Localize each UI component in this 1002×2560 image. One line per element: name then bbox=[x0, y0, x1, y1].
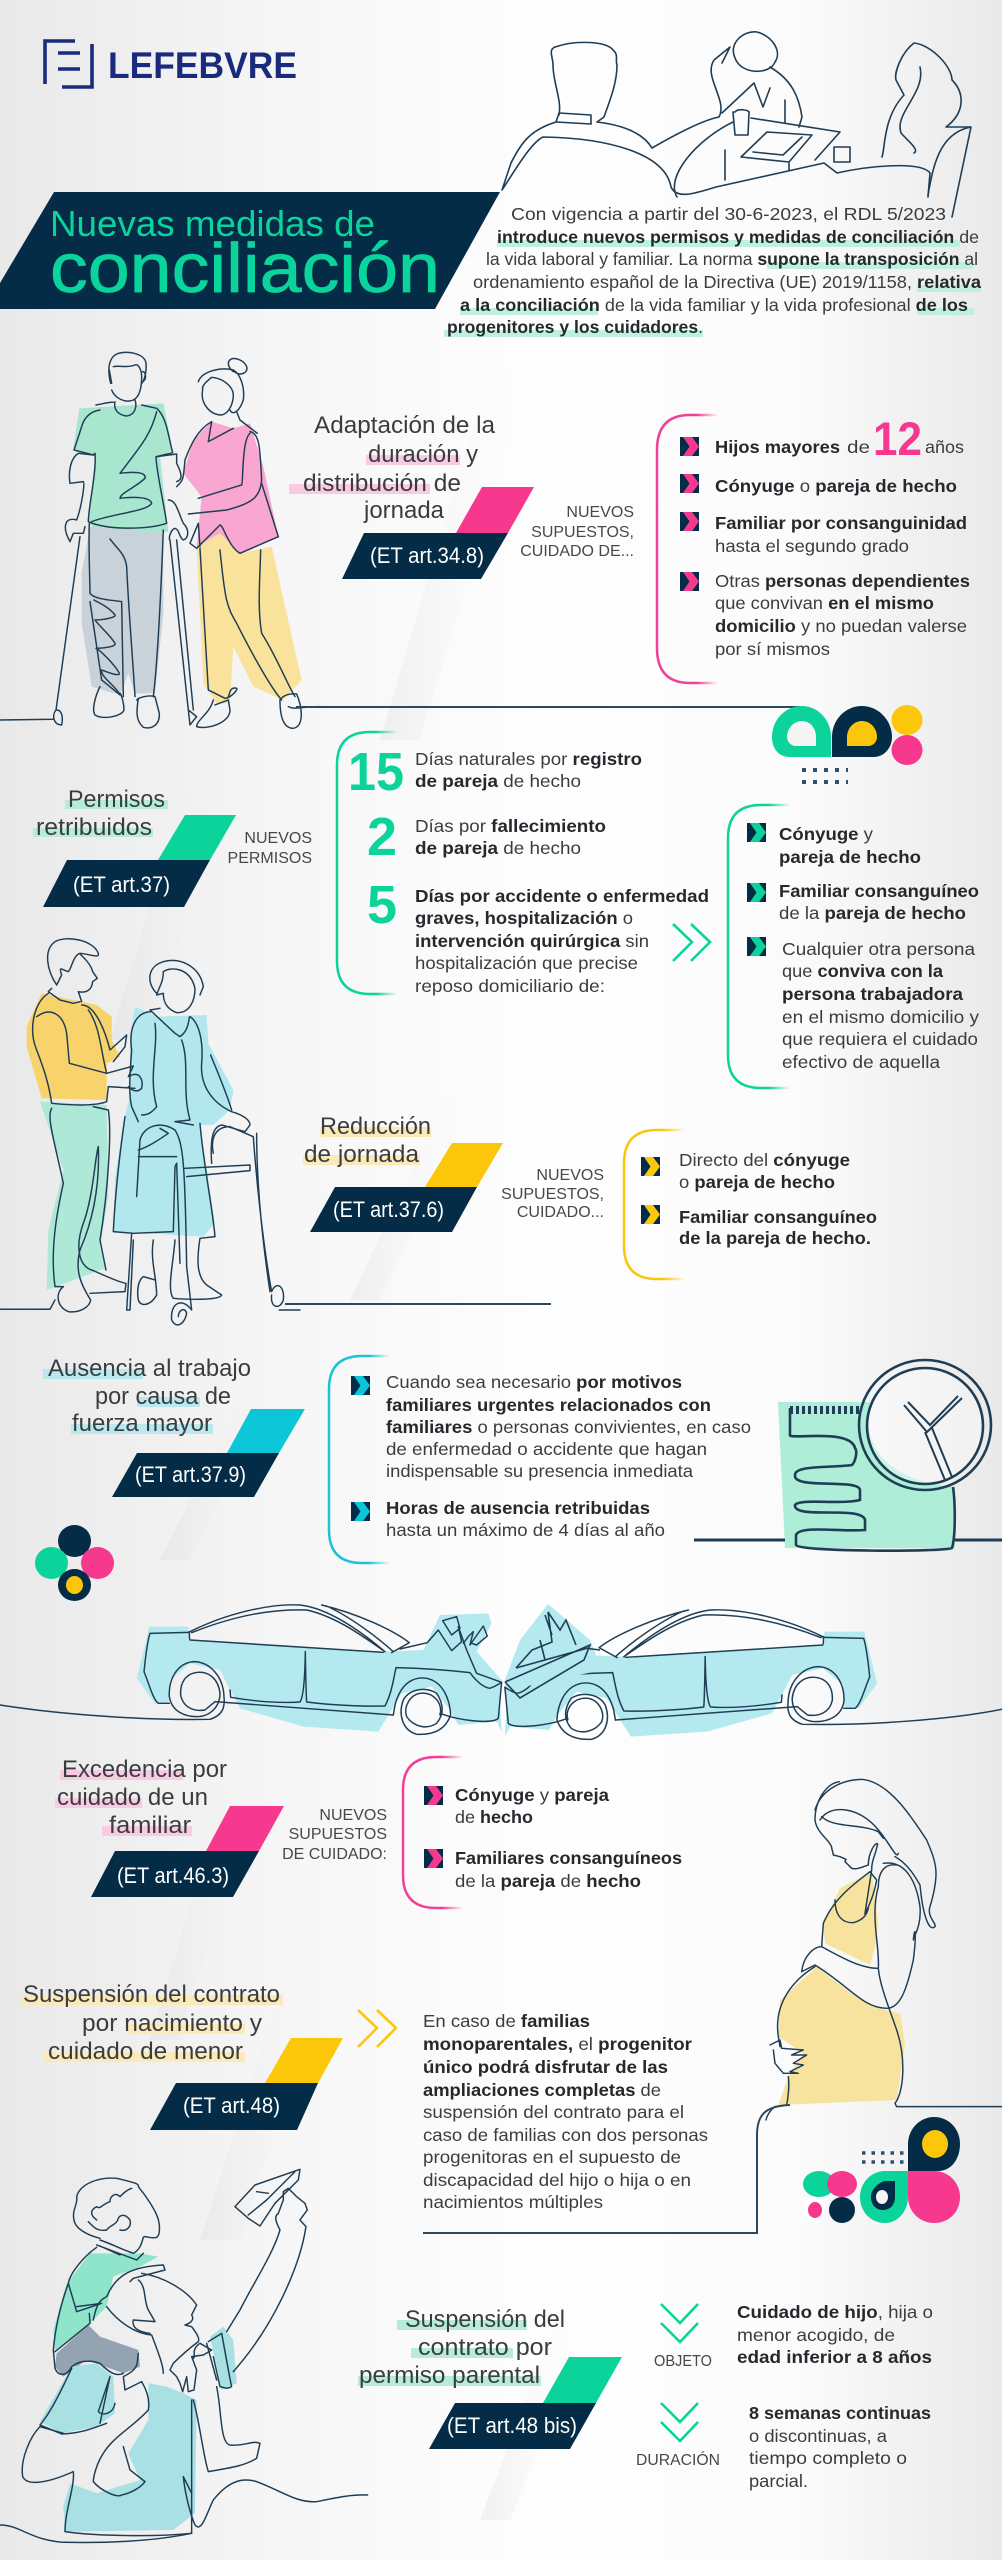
heading: fuerza mayor bbox=[72, 1410, 212, 1437]
bracket list bbox=[329, 1356, 751, 1563]
arrow: double chevron bbox=[358, 2010, 396, 2047]
title banner bbox=[0, 192, 500, 309]
bullet bbox=[680, 512, 699, 531]
panel: days list: de pareja de hecho bbox=[415, 838, 581, 858]
bracket list: familiares urgentes relacionados con bbox=[386, 1395, 711, 1415]
text block: monoparentales, el progenitor bbox=[423, 2034, 692, 2054]
bracket list: Horas de ausencia retribuidas bbox=[386, 1498, 650, 1518]
arrow: double chevron bbox=[673, 924, 710, 961]
illustration: notebook and clock bbox=[694, 1360, 1002, 1551]
heading: por causa de bbox=[95, 1383, 231, 1410]
bullet bbox=[747, 823, 766, 842]
logo: Lefebvre bbox=[45, 41, 297, 87]
bullet bbox=[747, 883, 766, 902]
bracket list: 12 bbox=[873, 412, 922, 465]
badge: (ET art.34.8) bbox=[370, 543, 484, 568]
label: NUEVOS bbox=[536, 1167, 604, 1184]
badge bbox=[429, 2357, 622, 2449]
section: excedencia bbox=[55, 1756, 682, 1908]
text block: duración: o discontinuas, a bbox=[749, 2426, 887, 2446]
illustration: meeting people bbox=[502, 32, 971, 217]
label: NUEVOS bbox=[566, 504, 634, 521]
panel: days list: hospitalización que precise bbox=[415, 953, 638, 973]
panel: days list: 15 bbox=[348, 742, 404, 802]
label: DE CUIDADO: bbox=[282, 1846, 387, 1863]
bullet bbox=[641, 1205, 660, 1224]
bracket list bbox=[657, 412, 970, 683]
badge: (ET art.37) bbox=[73, 872, 170, 897]
bracket list: familiares o personas convivientes, en caso bbox=[386, 1417, 751, 1437]
panel: days list: Días por fallecimiento bbox=[415, 816, 606, 836]
decoration: four circles bbox=[35, 1525, 114, 1601]
bracket list: Familiares consanguíneos bbox=[455, 1848, 682, 1868]
heading: Adaptación de la bbox=[314, 412, 495, 439]
bullet bbox=[747, 937, 766, 956]
section: permisos retribuidos bbox=[33, 732, 979, 1088]
label: SUPUESTOS, bbox=[501, 1186, 604, 1203]
heading: Reducción bbox=[320, 1113, 431, 1140]
illustration: car crash bbox=[0, 1604, 1002, 1739]
bullet bbox=[680, 572, 699, 591]
heading: retribuidos bbox=[36, 814, 152, 841]
label: CUIDADO... bbox=[517, 1204, 604, 1221]
label bbox=[228, 830, 312, 867]
bracket list: años bbox=[925, 437, 964, 457]
text block: duración: parcial. bbox=[749, 2471, 808, 2491]
bracket list: de enfermedad o accidente que hagan bbox=[386, 1439, 707, 1459]
heading bbox=[43, 1355, 251, 1437]
text block: ampliaciones completas de bbox=[423, 2080, 661, 2100]
badge bbox=[310, 1143, 503, 1232]
heading: Suspensión del contrato bbox=[23, 1981, 280, 2008]
text block: único podrá disfrutar de las bbox=[423, 2057, 668, 2077]
bracket list: indispensable su presencia inmediata bbox=[386, 1461, 693, 1481]
bullet bbox=[424, 1849, 443, 1868]
bullet bbox=[641, 1157, 660, 1176]
icon: chevrons duración bbox=[661, 2403, 698, 2441]
text block bbox=[423, 2011, 708, 2212]
bracket list bbox=[403, 1757, 682, 1908]
title line 1: Nuevas medidas de bbox=[50, 203, 375, 244]
bullet bbox=[680, 474, 699, 493]
badge: (ET art.37.6) bbox=[333, 1197, 444, 1222]
text block: objeto: menor acogido, de bbox=[737, 2325, 895, 2345]
bracket list: Cónyuge o pareja de hecho bbox=[715, 476, 957, 496]
bracket list: Hijos mayores bbox=[715, 437, 840, 457]
bracket list: Familiar por consanguinidad bbox=[715, 513, 967, 533]
line bbox=[423, 2105, 790, 2233]
bracket list: de la pareja de hecho. bbox=[679, 1228, 871, 1248]
panel: who: de la pareja de hecho bbox=[779, 903, 966, 923]
crash shards bbox=[505, 1604, 602, 1698]
heading bbox=[22, 1981, 283, 2065]
heading: de jornada bbox=[304, 1141, 419, 1168]
panel: who: en el mismo domicilio y bbox=[782, 1007, 979, 1027]
label: PERMISOS bbox=[228, 850, 312, 867]
badge: (ET art.46.3) bbox=[117, 1863, 229, 1888]
label: CUIDADO DE... bbox=[520, 543, 634, 560]
panel: who: pareja de hecho bbox=[779, 847, 921, 867]
panel: days list: de pareja de hecho bbox=[415, 771, 581, 791]
label: SUPUESTOS, bbox=[531, 524, 634, 541]
bracket list: Cuando sea necesario por motivos bbox=[386, 1372, 682, 1392]
text block: caso de familias con dos personas bbox=[423, 2125, 708, 2145]
heading: duración y bbox=[368, 441, 479, 468]
label bbox=[282, 1807, 387, 1863]
panel: days list: intervención quirúrgica sin bbox=[415, 931, 649, 951]
panel: days list: 5 bbox=[367, 875, 397, 935]
heading bbox=[55, 1756, 227, 1839]
bracket list: o pareja de hecho bbox=[679, 1172, 835, 1192]
label bbox=[501, 1167, 604, 1221]
intro text: ordenamiento español de la Directiva (UE) 2019/1158, relativa bbox=[473, 272, 981, 292]
panel: who: Cónyuge y bbox=[779, 824, 873, 844]
bullet bbox=[680, 437, 699, 456]
bracket list bbox=[624, 1130, 877, 1279]
title line 2: conciliación bbox=[50, 229, 440, 307]
panel: days list: graves, hospitalización o bbox=[415, 908, 633, 928]
text block: nacimientos múltiples bbox=[423, 2192, 603, 2212]
heading: Permisos bbox=[68, 786, 165, 813]
heading: distribución de bbox=[303, 470, 461, 497]
badge bbox=[112, 1409, 305, 1497]
text block: discapacidad del hijo o hija o en bbox=[423, 2170, 691, 2190]
panel: who: persona trabajadora bbox=[782, 984, 963, 1004]
icon: chevrons objeto bbox=[661, 2304, 698, 2342]
badge bbox=[342, 487, 534, 579]
label objeto: OBJETO bbox=[654, 2353, 712, 2370]
bracket list: de hecho bbox=[455, 1807, 533, 1827]
decoration: green navy shapes bbox=[772, 705, 922, 782]
panel: days list: 2 bbox=[367, 807, 397, 867]
section: reducción de jornada bbox=[303, 1113, 877, 1279]
label: SUPUESTOS bbox=[289, 1826, 387, 1843]
panel: days list: Días naturales por registro bbox=[415, 749, 642, 769]
badge bbox=[150, 2038, 343, 2130]
bracket list: hasta el segundo grado bbox=[715, 536, 909, 556]
illustration: pregnant woman bbox=[766, 1779, 1002, 2120]
bracket list: Directo del cónyuge bbox=[679, 1150, 850, 1170]
intro text: Con vigencia a partir del 30-6-2023, el RDL 5/2023 bbox=[511, 204, 946, 224]
bracket list: de bbox=[847, 437, 870, 457]
badge: (ET art.48 bis) bbox=[447, 2413, 577, 2438]
bracket list: Cónyuge y pareja bbox=[455, 1785, 609, 1805]
illustration: man with crutches and carer bbox=[0, 352, 320, 728]
panel: days list bbox=[337, 732, 709, 996]
intro text: a la conciliación de la vida familiar y la vida profesional de los bbox=[460, 295, 968, 315]
intro text: la vida laboral y familiar. La norma supone la transposición al bbox=[486, 249, 978, 269]
intro text: introduce nuevos permisos y medidas de conciliación de bbox=[497, 227, 979, 247]
bracket list: por sí mismos bbox=[715, 639, 830, 659]
intro text bbox=[444, 204, 981, 337]
bracket list: hasta un máximo de 4 días al año bbox=[386, 1520, 665, 1540]
badge: (ET art.48) bbox=[183, 2093, 280, 2118]
text block: duración bbox=[749, 2403, 931, 2491]
heading bbox=[289, 412, 495, 524]
panel: who: que conviva con la bbox=[782, 961, 943, 981]
logo: Lefebvre: LEFEBVRE bbox=[108, 45, 297, 86]
heading: familiar bbox=[109, 1812, 191, 1839]
bracket list: Otras personas dependientes bbox=[715, 571, 970, 591]
bracket list: de la pareja de hecho bbox=[455, 1871, 641, 1891]
section: adaptación de la jornada bbox=[289, 412, 970, 683]
text block: duración: tiempo completo o bbox=[749, 2448, 907, 2468]
panel: who: Cualquier otra persona bbox=[782, 939, 975, 959]
bullet bbox=[424, 1786, 443, 1805]
panel: days list: reposo domiciliario de: bbox=[415, 976, 605, 996]
text block: progenitoras en el supuesto de bbox=[423, 2147, 681, 2167]
heading: cuidado de un bbox=[57, 1784, 208, 1811]
decoration: shapes bottom right bbox=[803, 2117, 960, 2223]
illustration: father with child and paper plane bbox=[0, 2169, 368, 2542]
label bbox=[520, 504, 634, 560]
panel: days list: Días por accidente o enfermedad bbox=[415, 886, 709, 906]
heading bbox=[358, 2306, 565, 2389]
heading: permiso parental bbox=[359, 2362, 540, 2389]
panel: who bbox=[728, 805, 979, 1088]
text block: objeto: Cuidado de hijo , hija o bbox=[737, 2302, 933, 2322]
heading: por nacimiento y bbox=[82, 2010, 263, 2037]
section: suspensión permiso parental bbox=[358, 2302, 933, 2491]
section: ausencia al trabajo bbox=[43, 1355, 751, 1563]
text block: suspensión del contrato para el bbox=[423, 2102, 684, 2122]
heading: cuidado de menor bbox=[48, 2038, 243, 2065]
bracket list: Familiar consanguíneo bbox=[679, 1207, 877, 1227]
text block: duración: 8 semanas continuas bbox=[749, 2403, 931, 2423]
right car bbox=[505, 1610, 1002, 1739]
divider line 2 bbox=[285, 1303, 551, 1305]
left car bbox=[0, 1605, 502, 1734]
text block: En caso de familias bbox=[423, 2011, 590, 2031]
badge bbox=[91, 1806, 284, 1897]
illustration: carer with elderly woman and walker bbox=[0, 939, 300, 1325]
heading: contrato por bbox=[418, 2334, 552, 2361]
bullet bbox=[351, 1502, 370, 1521]
heading: Ausencia al trabajo bbox=[48, 1355, 251, 1382]
label: NUEVOS bbox=[319, 1807, 387, 1824]
intro text: progenitores y los cuidadores. bbox=[447, 317, 703, 337]
label duración: DURACIÓN bbox=[636, 2450, 720, 2469]
panel: who: Familiar consanguíneo bbox=[779, 881, 979, 901]
heading bbox=[33, 786, 168, 841]
section: suspensión nacimiento bbox=[22, 1981, 790, 2233]
heading: Excedencia por bbox=[62, 1756, 227, 1783]
bracket list: domicilio y no puedan valerse bbox=[715, 616, 967, 636]
badge bbox=[43, 815, 236, 907]
heading bbox=[303, 1113, 431, 1168]
panel: who: efectivo de aquella bbox=[782, 1052, 940, 1072]
bullet bbox=[351, 1376, 370, 1395]
text block: objeto bbox=[737, 2302, 933, 2367]
panel: who: que requiera el cuidado bbox=[782, 1029, 978, 1049]
bracket list: que convivan en el mismo bbox=[715, 593, 934, 613]
label: NUEVOS bbox=[244, 830, 312, 847]
heading: jornada bbox=[363, 497, 444, 524]
text block: objeto: edad inferior a 8 años bbox=[737, 2347, 932, 2367]
divider line 1 bbox=[296, 706, 800, 708]
badge: (ET art.37.9) bbox=[135, 1462, 246, 1487]
heading: Suspensión del bbox=[405, 2306, 565, 2333]
